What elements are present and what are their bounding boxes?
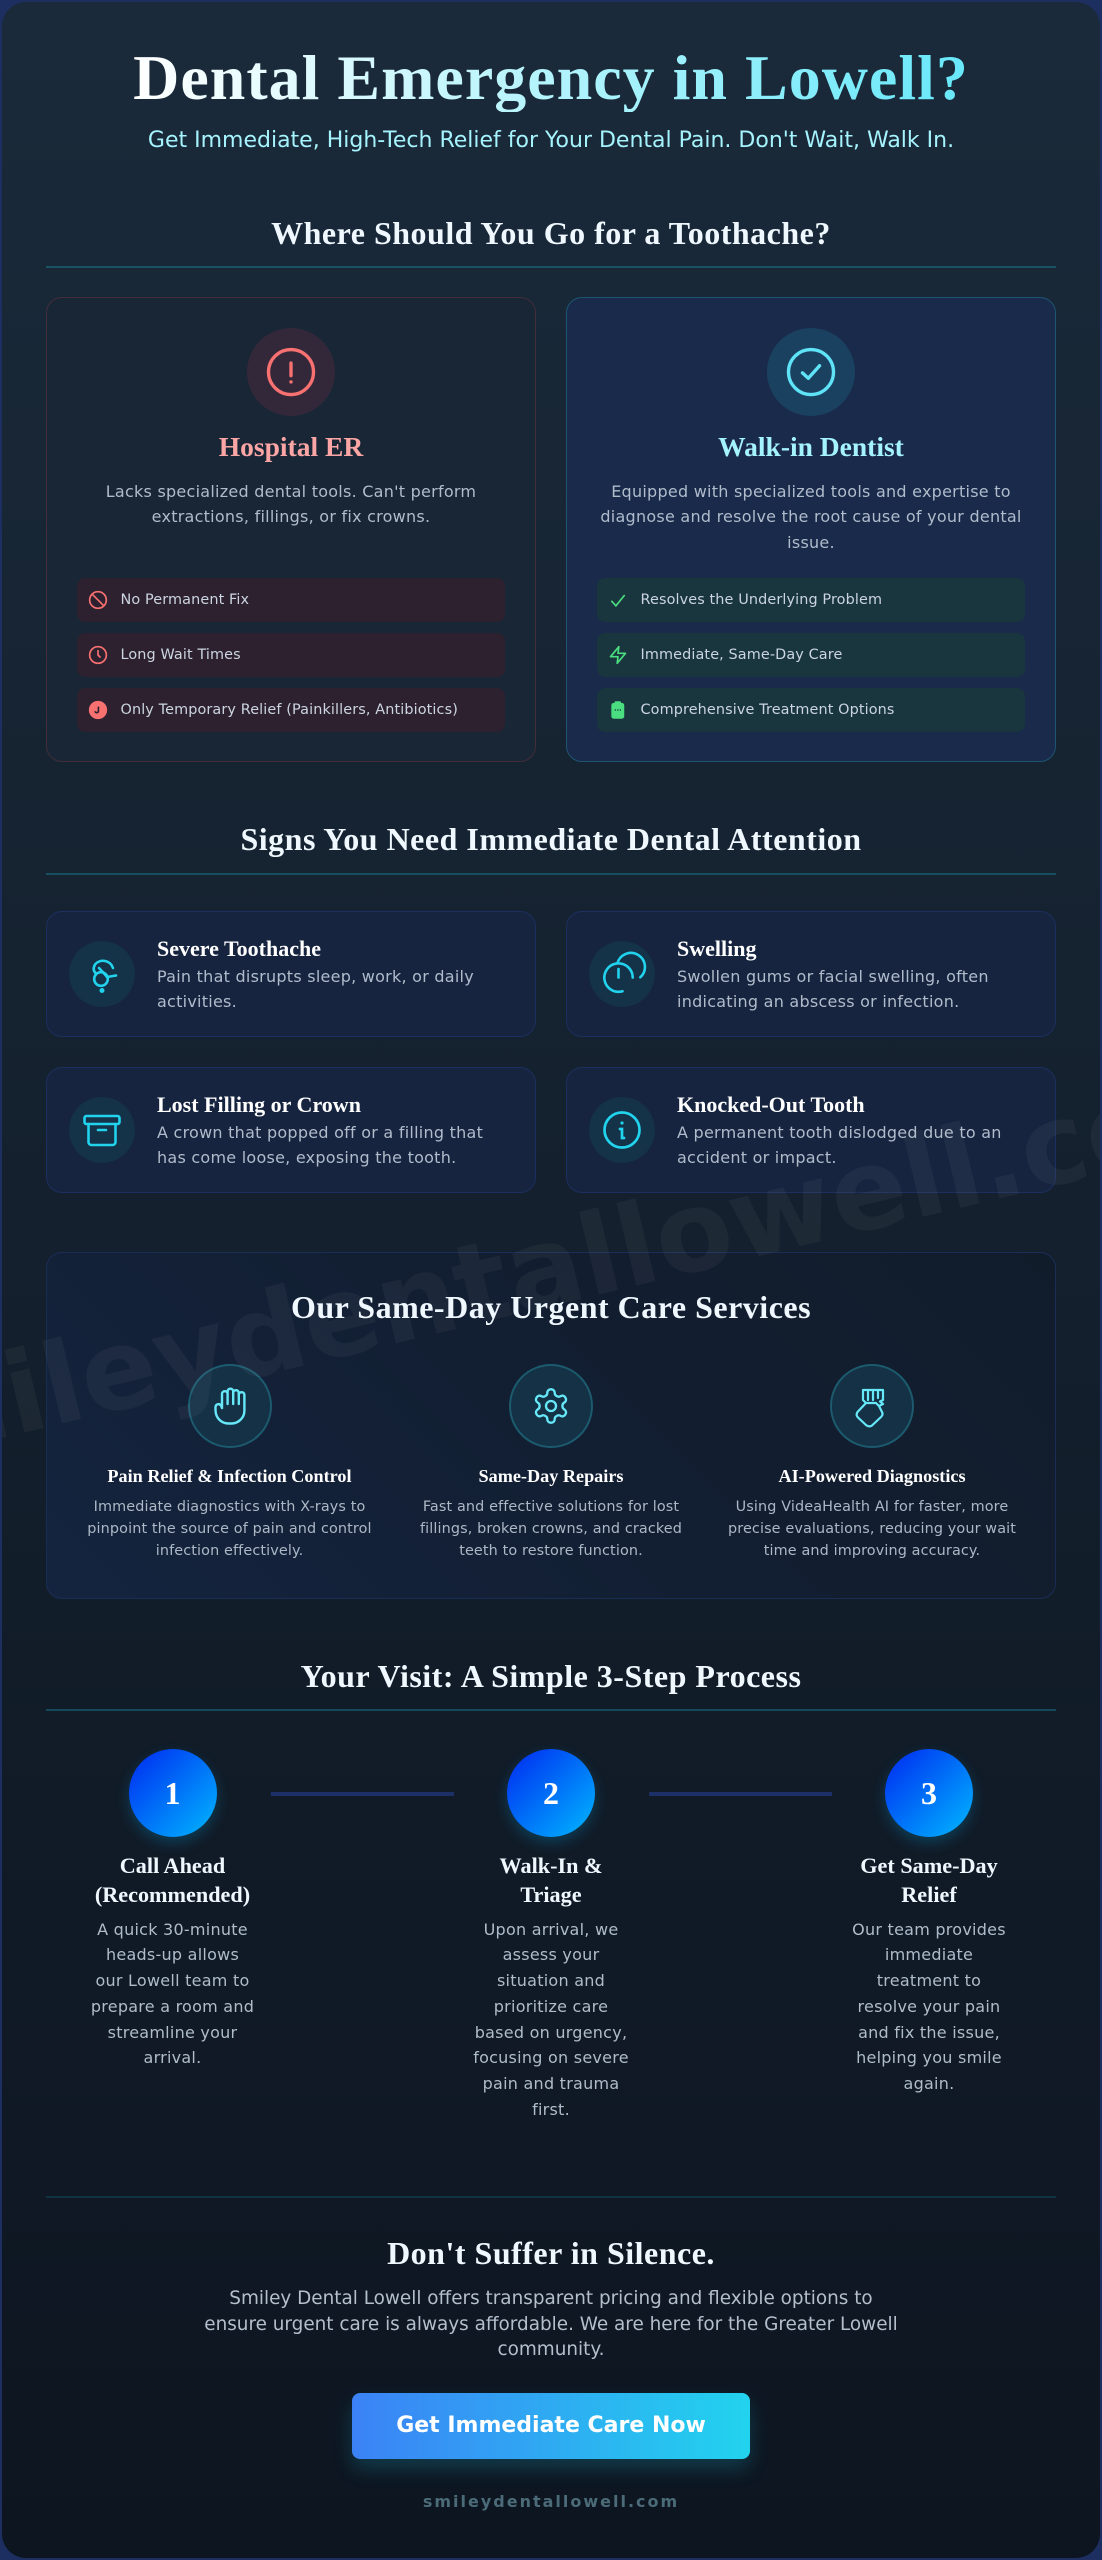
text xyxy=(728,1499,1016,1559)
text xyxy=(852,1920,1006,2093)
text: again. xyxy=(904,2074,954,2093)
heading: Severe Toothache xyxy=(157,936,321,961)
text: focusing on severe xyxy=(473,2048,629,2067)
list item: resolves the problem xyxy=(597,578,1025,622)
text: indicating an abscess or infection. xyxy=(677,992,959,1011)
text: helping you smile xyxy=(856,2048,1002,2067)
text: Swollen gums or facial swelling, often xyxy=(677,967,989,986)
icon: check circle xyxy=(767,328,855,416)
heading: walk-in dentist: Walk-in Dentist xyxy=(718,430,904,462)
panel: knocked-out tooth xyxy=(566,1067,1056,1193)
heading: Pain Relief & Infection Control xyxy=(107,1466,352,1486)
text xyxy=(157,1123,483,1167)
panel: severe toothache xyxy=(46,911,536,1037)
text: walk-in dentist description: issue. xyxy=(787,533,835,552)
text: walk-in dentist description: Equipped with specialized tools and expertise to xyxy=(611,482,1011,501)
text: Pain that disrupts sleep, work, or daily xyxy=(157,967,474,986)
arrow: connector 1 xyxy=(271,1792,454,1796)
text: infection effectively. xyxy=(156,1543,303,1559)
text: prepare a room and xyxy=(91,1997,254,2016)
arrow: connector 2 xyxy=(649,1792,832,1796)
text: Upon arrival, we xyxy=(484,1920,618,1939)
text: pain and trauma xyxy=(483,2074,619,2093)
icon: info circle xyxy=(589,1097,655,1163)
text: call to action xyxy=(204,2288,898,2360)
panel: services xyxy=(46,1252,1056,1599)
button xyxy=(352,2393,750,2459)
text: resolve your pain xyxy=(858,1997,1000,2016)
step 3 xyxy=(852,1749,1006,2093)
text: call to action: Smiley Dental Lowell offers transparent pricing and flexible options to xyxy=(229,2288,873,2309)
list item: long wait times: Long Wait Times xyxy=(120,647,241,663)
text: treatment to xyxy=(877,1971,981,1990)
text: hospital ER description xyxy=(106,482,476,526)
text: walk-in dentist description: diagnose and resolve the root cause of your dental xyxy=(600,507,1022,526)
service: AI diagnostics xyxy=(728,1364,1016,1559)
list item: comprehensive options: Comprehensive Treatment Options xyxy=(640,702,895,718)
text: first. xyxy=(532,2100,570,2119)
list item: resolves the problem: Resolves the Underlying Problem xyxy=(640,592,882,608)
text: A permanent tooth dislodged due to an xyxy=(677,1123,1002,1142)
text: streamline your xyxy=(108,2022,237,2042)
heading: Triage xyxy=(520,1882,582,1907)
list item: no permanent fix xyxy=(77,578,505,622)
heading: Knocked-Out Tooth xyxy=(677,1092,865,1117)
number badge: 1 xyxy=(164,1775,180,1811)
text xyxy=(157,967,474,1011)
step 2 xyxy=(473,1749,629,2119)
text: based on urgency, xyxy=(475,2022,627,2042)
text: hospital ER description: Lacks specialized dental tools. Can't perform xyxy=(106,482,476,501)
heading: Walk-In & xyxy=(500,1853,602,1878)
icon: alert circle xyxy=(247,328,335,416)
footer url: smileydentallowell.com xyxy=(423,2492,679,2510)
text: has come loose, exposing the tooth. xyxy=(157,1148,456,1167)
text: immediate xyxy=(885,1945,973,1964)
heading: hospital ER: Hospital ER xyxy=(219,430,363,462)
number badge xyxy=(128,1749,216,1837)
list item: no permanent fix: No Permanent Fix xyxy=(120,592,249,608)
panel: hospital ER xyxy=(46,297,536,762)
heading: Relief xyxy=(901,1882,957,1907)
heading xyxy=(95,1853,250,1907)
text xyxy=(87,1499,372,1559)
text: activities. xyxy=(157,992,237,1011)
text: A crown that popped off or a filling that xyxy=(157,1123,483,1142)
text: assess your xyxy=(503,1945,599,1964)
panel: swelling xyxy=(566,911,1056,1037)
panel: walk-in dentist xyxy=(566,297,1056,762)
title: Dental Emergency in Lowell? xyxy=(133,42,969,113)
text: situation and xyxy=(497,1971,605,1990)
number badge: 2 xyxy=(543,1775,559,1811)
text: teeth to restore function. xyxy=(459,1543,643,1559)
text: walk-in dentist description xyxy=(600,482,1022,552)
text: time and improving accuracy. xyxy=(764,1543,980,1559)
list item: only temporary relief xyxy=(77,688,505,732)
text: A quick 30-minute xyxy=(97,1920,248,1939)
service: pain relief xyxy=(87,1364,372,1559)
heading xyxy=(500,1853,602,1907)
text xyxy=(677,1123,1002,1167)
list item: same-day care: Immediate, Same-Day Care xyxy=(640,647,842,663)
number badge xyxy=(885,1749,973,1837)
number badge: 3 xyxy=(921,1775,937,1811)
icon: swelling xyxy=(589,941,655,1007)
list item: same-day care xyxy=(597,633,1025,677)
heading: process: Your Visit: A Simple 3-Step Process xyxy=(301,1658,801,1694)
heading: call to action: Don't Suffer in Silence. xyxy=(387,2235,715,2271)
text: call to action: ensure urgent care is always affordable. We are here for the Greater Lowell xyxy=(204,2314,898,2335)
subtitle: Get Immediate, High-Tech Relief for Your Dental Pain. Don't Wait, Walk In. xyxy=(148,128,954,153)
text xyxy=(473,1920,629,2119)
icon: toothache xyxy=(69,941,135,1007)
icon: archive box xyxy=(69,1097,135,1163)
text: accident or impact. xyxy=(677,1148,837,1167)
step 1 xyxy=(91,1749,254,2067)
heading: Swelling xyxy=(677,936,756,961)
text: pinpoint the source of pain and control xyxy=(87,1521,372,1537)
heading: where to go: Where Should You Go for a Toothache? xyxy=(271,215,831,251)
text: heads-up allows xyxy=(106,1945,239,1964)
heading: AI-Powered Diagnostics xyxy=(778,1466,966,1486)
icon: hand xyxy=(188,1364,272,1448)
list item: comprehensive options xyxy=(597,688,1025,732)
heading: Call Ahead xyxy=(120,1853,225,1878)
heading: signs: Signs You Need Immediate Dental Attention xyxy=(240,821,862,857)
icon: AI tool xyxy=(830,1364,914,1448)
text: Fast and effective solutions for lost xyxy=(423,1499,679,1515)
heading xyxy=(860,1853,998,1907)
icon: gear xyxy=(509,1364,593,1448)
text: prioritize care xyxy=(494,1997,608,2016)
heading: services: Our Same-Day Urgent Care Services xyxy=(291,1289,811,1325)
text: our Lowell team to xyxy=(95,1971,250,1990)
heading: (Recommended) xyxy=(95,1882,250,1907)
service: same-day repairs xyxy=(420,1364,682,1559)
button: Get Immediate Care Now xyxy=(396,2413,706,2438)
panel: lost filling xyxy=(46,1067,536,1193)
text xyxy=(677,967,989,1011)
number badge xyxy=(507,1749,595,1837)
list item: long wait times xyxy=(77,633,505,677)
heading: Lost Filling or Crown xyxy=(157,1092,361,1117)
text xyxy=(91,1920,254,2067)
text: arrival. xyxy=(144,2048,201,2067)
text: hospital ER description: extractions, fillings, or fix crowns. xyxy=(152,507,430,526)
text: Immediate diagnostics with X-rays to xyxy=(94,1499,365,1515)
text: Using VideaHealth AI for faster, more xyxy=(736,1499,1008,1515)
heading: Same-Day Repairs xyxy=(478,1466,623,1486)
text: fillings, broken crowns, and cracked xyxy=(420,1521,682,1537)
text: Our team provides xyxy=(852,1920,1006,1939)
text: precise evaluations, reducing your wait xyxy=(728,1521,1016,1537)
text xyxy=(420,1499,682,1559)
heading: Get Same-Day xyxy=(860,1853,998,1878)
text: call to action: community. xyxy=(498,2339,604,2360)
text: and fix the issue, xyxy=(858,2022,1000,2042)
list item: only temporary relief: Only Temporary Relief (Painkillers, Antibiotics) xyxy=(120,702,458,718)
